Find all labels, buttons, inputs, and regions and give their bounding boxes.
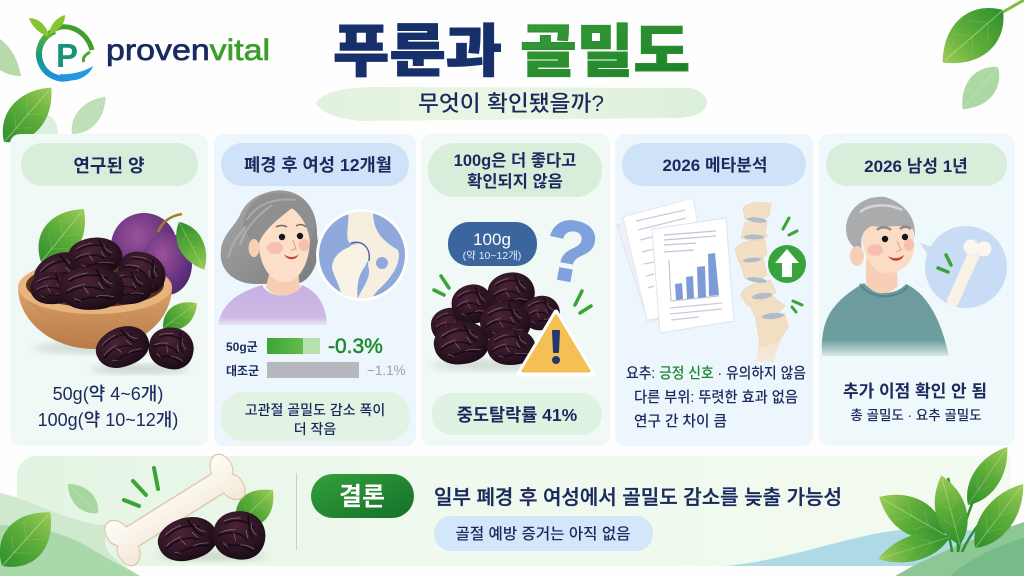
heading pill: 2026 메타분석 [662,156,768,175]
decorative top-left leaves [0,39,113,154]
note pill: 골절 예방 증거는 아직 없음 [456,525,630,543]
summary text: 요추: 긍정 신호 · 유의하지 않음 [626,365,806,382]
icon: warning triangle [519,312,593,374]
illustration: papers with chart [617,198,734,333]
divider [296,473,298,550]
conclusion badge: 결론 [339,483,385,511]
panel: 2026 men 1 year [819,134,1015,446]
illustration: prune pile [430,272,560,370]
panel: 100g not confirmed better [421,134,610,446]
result text: 추가 이점 확인 안 됨 [843,382,987,401]
doses text [38,384,178,430]
subtitle band [316,87,707,121]
bar chart: 50g vs control: 50g군 [226,340,258,354]
logo mark: P [56,37,78,74]
decorative hills [0,493,1024,576]
heading pill [622,143,806,186]
doses text: 50g(약 4~6개) [53,384,163,404]
dose badge: (약 10~12개) [463,250,521,262]
result pill: 더 작음 [294,421,336,437]
heading pill: 확인되지 않음 [467,172,563,191]
illustration: small leaf [61,477,105,520]
illustration: spine [735,203,788,362]
doses text: 100g(약 10~12개) [38,410,178,430]
illustration: plant [870,440,1024,571]
illustration: older man [822,197,949,356]
heading pill: 2026 남성 1년 [864,157,968,176]
bar chart: 50g vs control: −1.1% [367,363,406,378]
illustration: woman [218,190,327,325]
summary text [626,365,806,430]
subtitle band: 무엇이 확인됐을까? [418,91,604,116]
illustration: prunes in bowl and plums [18,197,215,375]
bar chart: 50g vs control: -0.3% [328,335,383,358]
result pill [221,392,410,441]
conclusion badge [311,474,414,518]
icon: green up arrow [768,245,806,283]
title: 골밀도 [520,20,690,84]
decorative top-right leaves [928,0,1024,118]
result pill: 고관절 골밀도 감소 폭이 [245,402,385,418]
panel: postmenopausal women 12 months [214,134,416,446]
heading pill: 연구된 양 [73,156,145,176]
result text [843,382,987,423]
icon: question mark: ? [536,200,605,304]
result text: 총 골밀도 · 요추 골밀도 [850,408,982,423]
dropout pill: 중도탈락률 41% [457,405,578,425]
dose badge [448,222,537,266]
summary text: 연구 간 차이 큼 [634,413,727,430]
speech bubble with bone [920,226,1007,308]
heading pill [428,143,602,197]
logo [29,15,270,80]
bar chart: 50g vs control: 대조군 [226,364,259,378]
conclusion text: 일부 폐경 후 여성에서 골밀도 감소를 늦출 가능성 [434,486,842,509]
icon: green ticks [434,276,591,313]
illustration: bottom-left leaf [0,499,66,576]
illustration: bone and prunes [100,450,284,570]
title [333,20,690,84]
note pill [434,516,653,551]
panel: conclusion [0,440,1024,576]
logo wordmark: proven vital [106,34,270,67]
heading pill [21,143,198,186]
heading pill [826,143,1007,186]
heading pill: 100g은 더 좋다고 [454,151,576,170]
panel: studied amount [10,134,215,446]
panel: 2026 meta-analysis [615,134,813,446]
logo mark [29,15,93,80]
bar chart: 50g vs control [226,335,406,378]
summary text: 다른 부위: 뚜렷한 효과 없음 [634,389,798,406]
title: 푸룬과 [333,20,502,84]
heading pill: 폐경 후 여성 12개월 [244,155,392,175]
dropout pill [432,393,602,435]
heading pill [221,143,409,186]
illustration: hip joint [316,205,408,305]
icon: green ticks [124,468,158,506]
dose badge: 100g [473,230,511,249]
icon: green ticks [783,218,802,312]
